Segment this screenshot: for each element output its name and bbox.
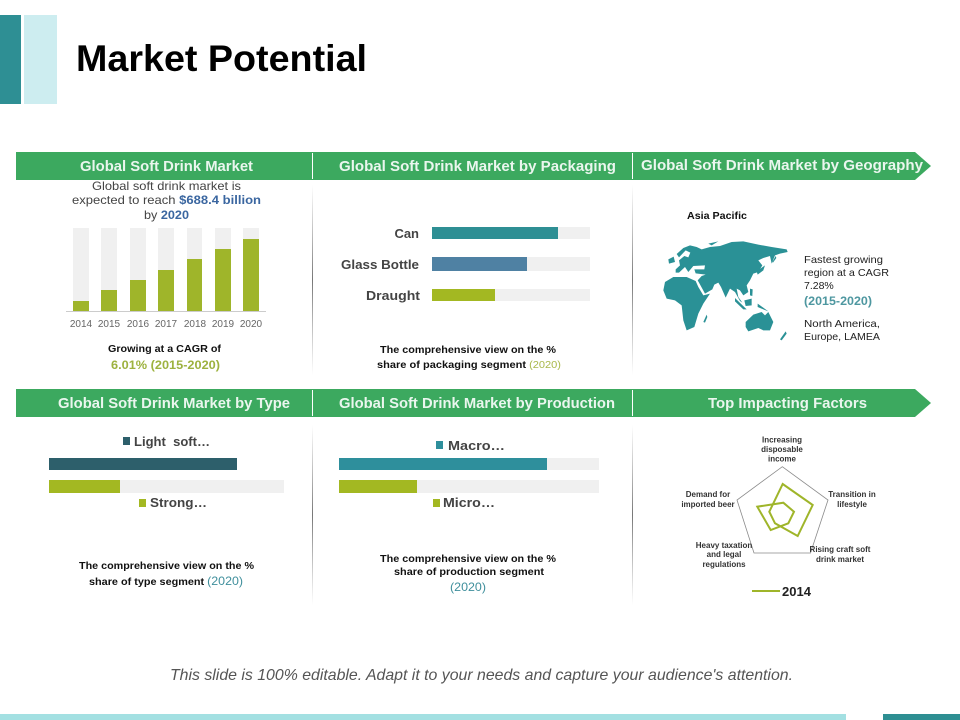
bar chart: market by year: 2020 xyxy=(240,319,263,330)
bar chart: market by year xyxy=(66,228,266,330)
bottom accent bars xyxy=(0,714,960,720)
market intro text: Global soft drink market is xyxy=(92,179,241,193)
panel: global market xyxy=(66,179,266,372)
market intro text: by 2020 xyxy=(144,208,189,222)
CAGR caption: Growing at a CAGR of xyxy=(108,343,222,355)
bar chart: production: Micro… xyxy=(443,495,495,510)
bar chart: packaging: Draught xyxy=(366,288,421,303)
growth text: region at a CAGR xyxy=(804,267,889,279)
radar legend: 2014 xyxy=(782,584,812,599)
production caption: (2020) xyxy=(450,580,486,594)
radar chart xyxy=(737,467,828,553)
bar chart: packaging: Glass Bottle xyxy=(341,257,419,272)
bar chart: market by year: 2019 xyxy=(212,319,235,330)
heading: factors: Top Impacting Factors xyxy=(708,395,867,412)
radar axis labels: disposable xyxy=(761,445,803,454)
panel: production xyxy=(339,438,599,594)
growth text: Fastest growing xyxy=(804,254,883,266)
bar chart: production xyxy=(339,438,599,510)
radar axis labels: Transition in xyxy=(828,490,876,499)
top heading band xyxy=(16,152,931,180)
growth text: North America, xyxy=(804,318,880,330)
production caption xyxy=(380,553,557,594)
radar axis labels: Increasing xyxy=(762,436,802,444)
panel: packaging xyxy=(341,226,590,371)
radar axis labels: Heavy taxation xyxy=(696,541,752,550)
map: Asia Pacific xyxy=(663,241,788,340)
heading: market: Global Soft Drink Market xyxy=(80,158,253,175)
CAGR caption xyxy=(108,343,222,372)
CAGR caption: 6.01% (2015-2020) xyxy=(111,358,220,372)
packaging caption: share of packaging segment (2020) xyxy=(377,359,561,371)
bar chart: packaging xyxy=(341,226,590,303)
panel: type xyxy=(49,434,284,588)
heading: production: Global Soft Drink Market by Production xyxy=(339,395,615,412)
header accent blocks xyxy=(0,15,57,104)
packaging caption: The comprehensive view on the % xyxy=(380,344,557,356)
packaging caption xyxy=(377,344,561,371)
panel: geography xyxy=(663,210,889,343)
radar axis labels xyxy=(681,436,876,569)
heading: type: Global Soft Drink Market by Type xyxy=(58,395,290,412)
production caption: share of production segment xyxy=(394,566,545,578)
title: Market Potential xyxy=(76,38,367,79)
type caption: The comprehensive view on the % xyxy=(79,560,255,572)
footer note: This slide is 100% editable. Adapt it to your needs and capture your audience's attention. xyxy=(170,667,793,684)
bar chart: type: Strong… xyxy=(150,495,207,510)
growth text xyxy=(804,254,889,343)
radar axis labels: Rising craft soft xyxy=(810,545,871,554)
radar axis labels: lifestyle xyxy=(837,500,867,509)
growth text: Europe, LAMEA xyxy=(804,331,880,343)
bar chart: packaging: Can xyxy=(394,226,419,241)
radar axis labels: and legal xyxy=(707,550,741,559)
heading: packaging: Global Soft Drink Market by Packaging xyxy=(339,158,616,175)
bar chart: type: Light soft… xyxy=(134,434,210,449)
production caption: The comprehensive view on the % xyxy=(380,553,557,565)
radar axis labels: Demand for xyxy=(686,490,730,499)
bar chart: market by year: 2017 xyxy=(155,319,178,330)
panel: impacting factors xyxy=(681,436,876,599)
bottom heading band xyxy=(16,389,931,417)
market intro text xyxy=(72,179,261,222)
growth text: 7.28% xyxy=(804,280,834,292)
radar axis labels: regulations xyxy=(702,560,746,569)
radar legend xyxy=(752,584,812,599)
type caption xyxy=(79,560,255,588)
bar chart: production: Macro… xyxy=(448,438,505,453)
type caption: share of type segment (2020) xyxy=(89,574,243,588)
bar chart: market by year: 2015 xyxy=(98,319,121,330)
growth text: (2015-2020) xyxy=(804,294,872,308)
bar chart: type xyxy=(49,434,284,510)
market intro text: expected to reach $688.4 billion xyxy=(72,193,261,207)
region label: Asia Pacific xyxy=(687,210,747,222)
radar axis labels: income xyxy=(768,454,797,464)
bar chart: market by year: 2016 xyxy=(127,319,150,330)
bar chart: market by year: 2018 xyxy=(184,319,207,330)
radar axis labels: drink market xyxy=(816,555,864,564)
radar axis labels: imported beer xyxy=(681,500,735,509)
heading: geography: Global Soft Drink Market by Geography xyxy=(641,157,924,174)
bar chart: market by year: 2014 xyxy=(70,319,93,330)
